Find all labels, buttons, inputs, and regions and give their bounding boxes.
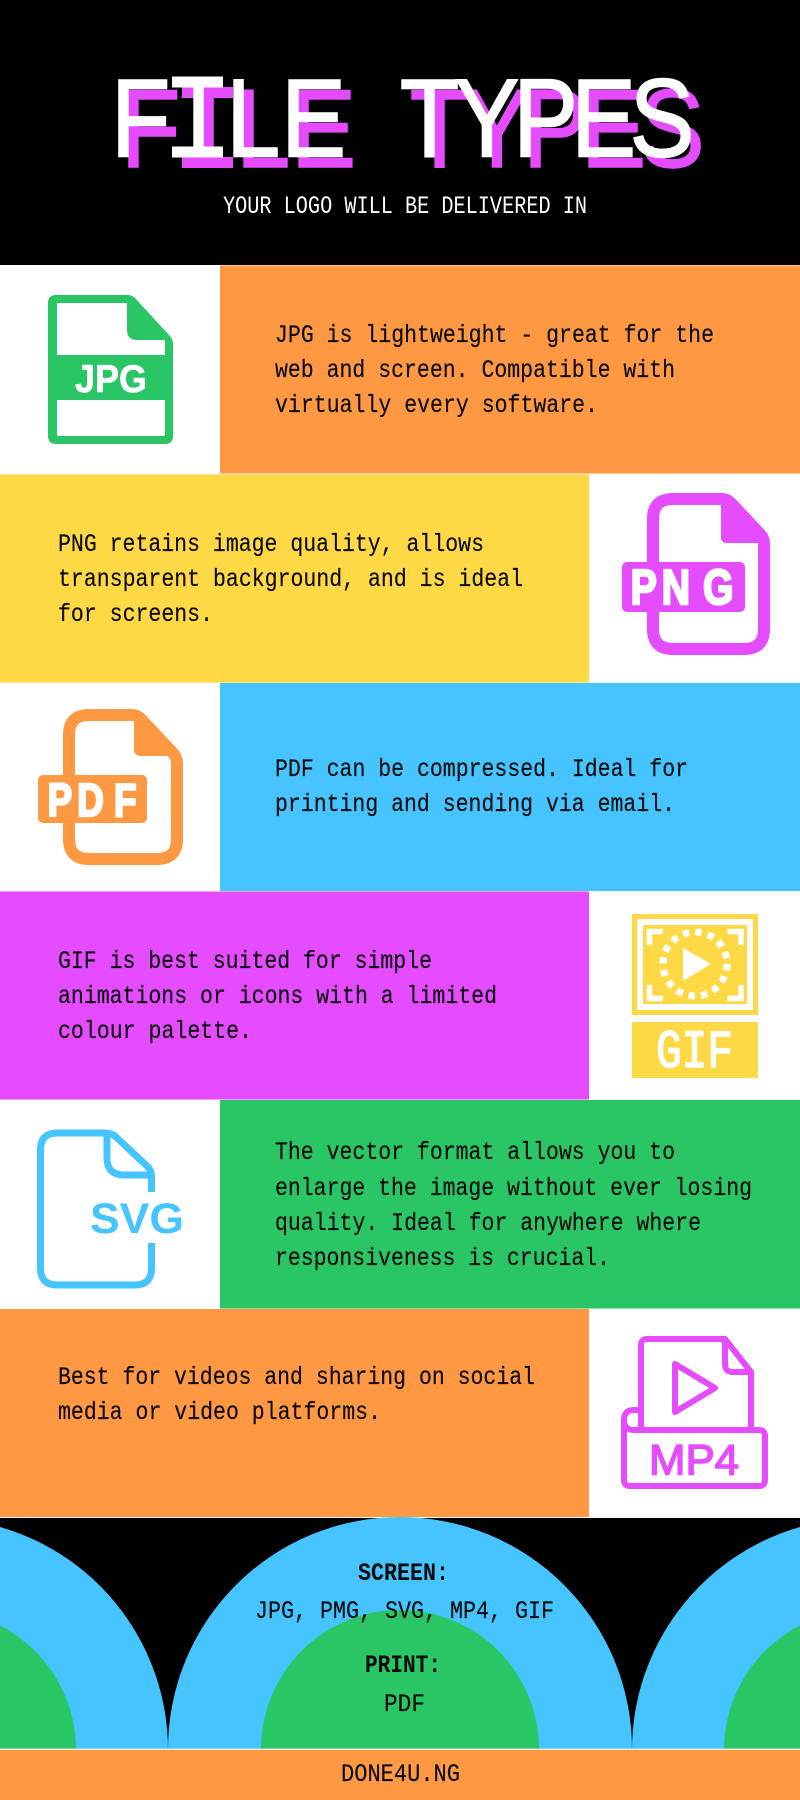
description: MP4: Best for videos and sharing on social — [58, 1363, 535, 1392]
title: FILE TYPES: FILE TYPES — [121, 67, 705, 191]
footer — [0, 1748, 800, 1800]
description: JPG: virtually every software. — [275, 391, 598, 420]
description: GIF: colour palette. — [58, 1017, 252, 1046]
icon: PNG file: PNG — [631, 561, 733, 615]
header panel — [0, 0, 800, 265]
description: PDF: printing and sending via email. — [275, 790, 675, 819]
description: PDF — [275, 755, 688, 819]
description: PDF: PDF can be compressed. Ideal for — [275, 755, 688, 784]
icon: MP4 file — [624, 1339, 765, 1486]
icon: PDF file: PDF — [48, 774, 136, 826]
description: PNG: PNG retains image quality, allows — [58, 530, 484, 559]
screen formats: JPG, PMG, SVG, MP4, GIF — [255, 1597, 554, 1626]
title: FILE TYPES: FILE TYPES — [111, 57, 695, 181]
description: MP4 — [58, 1363, 535, 1427]
panel: usage summary — [0, 1517, 800, 1749]
description: JPG: web and screen. Compatible with — [275, 356, 675, 385]
description: SVG: quality. Ideal for anywhere where — [275, 1209, 701, 1238]
description: SVG: The vector format allows you to — [275, 1138, 675, 1167]
screen heading: SCREEN: — [358, 1559, 449, 1588]
icon: JPG file: JPG — [75, 358, 147, 401]
icon: PDF file — [38, 715, 177, 859]
icon: MP4 file: MP4 — [649, 1436, 739, 1484]
panel: PDF — [0, 683, 800, 891]
description: JPG: JPG is lightweight - great for the — [275, 321, 714, 350]
panel: GIF — [0, 892, 800, 1100]
panel: PNG — [0, 474, 800, 682]
print formats: PDF — [384, 1690, 425, 1719]
description: SVG — [275, 1138, 752, 1273]
arches — [0, 1517, 800, 1749]
icon: SVG file: SVG — [90, 1195, 184, 1243]
icon: SVG file — [40, 1133, 184, 1285]
description: GIF: GIF is best suited for simple — [58, 947, 432, 976]
footer: DONE4U.NG — [341, 1760, 460, 1789]
description: GIF — [58, 947, 497, 1046]
subtitle: YOUR LOGO WILL BE DELIVERED IN — [223, 192, 587, 221]
description: PNG — [58, 530, 523, 629]
print heading: PRINT: — [365, 1651, 441, 1680]
description: MP4: media or video platforms. — [58, 1398, 381, 1427]
description: PNG: transparent background, and is ideal — [58, 565, 523, 594]
description: PNG: for screens. — [58, 600, 213, 629]
description: SVG: responsiveness is crucial. — [275, 1244, 610, 1273]
icon: GIF file — [632, 914, 758, 1084]
icon: JPG file — [48, 295, 173, 444]
panel: SVG — [0, 1100, 800, 1308]
description: GIF: animations or icons with a limited — [58, 982, 497, 1011]
icon: PNG file — [622, 499, 764, 649]
panel: MP4 — [0, 1309, 800, 1517]
panel: JPG — [0, 266, 800, 474]
description: JPG — [275, 321, 714, 420]
icon: GIF file: GIF — [656, 1023, 733, 1084]
